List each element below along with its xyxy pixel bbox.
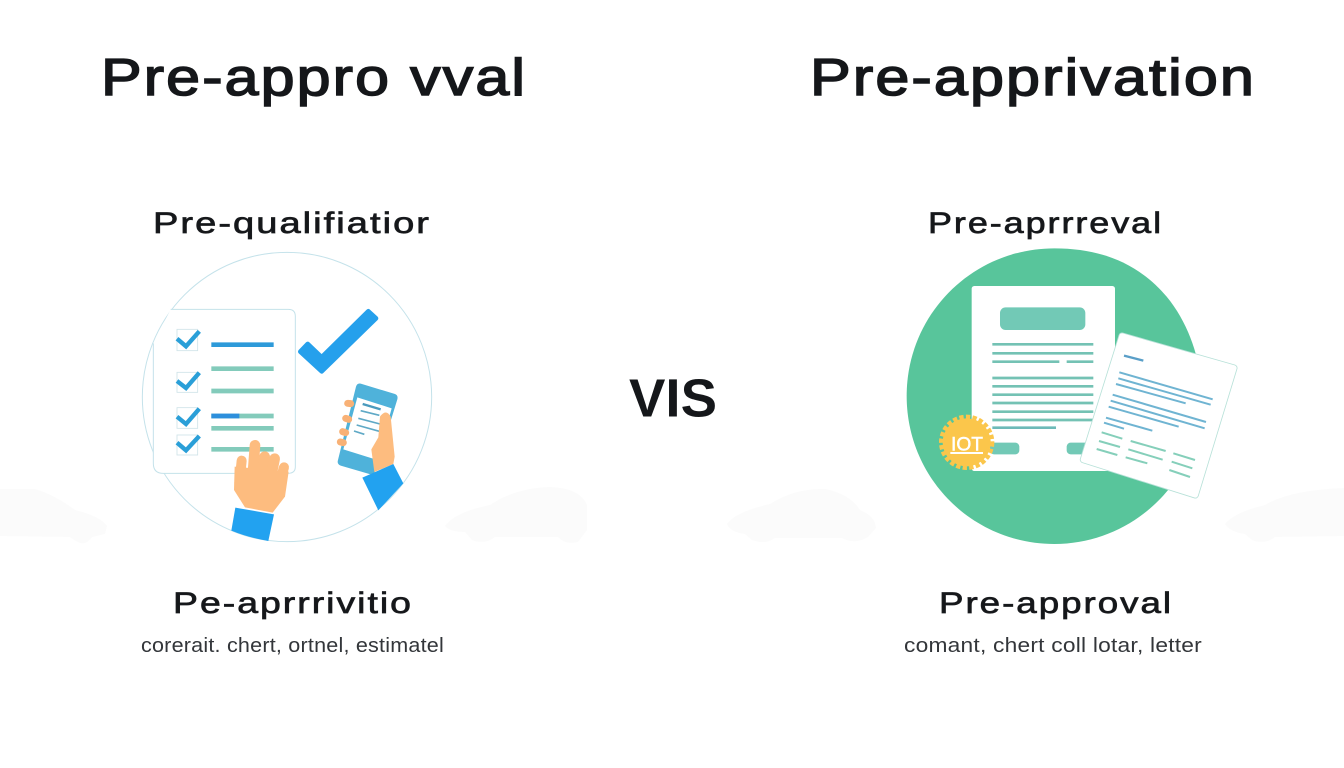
left option label: Pe-aprrrivitio (173, 587, 413, 620)
letter table lines (1097, 432, 1195, 477)
versus label: VIS (629, 368, 717, 428)
list lines (211, 345, 274, 449)
checklist paper (153, 309, 295, 473)
document lines (992, 344, 1093, 428)
letter body lines (1104, 356, 1213, 431)
check marks (177, 331, 199, 450)
document buttons (990, 443, 1019, 454)
header bar (1000, 307, 1085, 330)
left requirements text: corerait. chert, ortnel, estimatel (141, 635, 444, 657)
phone text lines (354, 404, 381, 434)
tilted letter (1083, 336, 1234, 495)
hand on checklist (231, 445, 289, 541)
left cuff (231, 508, 274, 541)
seal badge (941, 417, 992, 468)
right requirements text: comant, chert coll lotar, letter (904, 635, 1202, 657)
right subheading: Pre-aprrreval (928, 207, 1163, 240)
checkboxes (177, 329, 198, 455)
main document (972, 286, 1115, 471)
outline circle (142, 252, 432, 542)
thumb and palm (371, 412, 395, 472)
right cuff (362, 464, 403, 510)
left subheading: Pre-qualifiatior (153, 207, 431, 240)
seal badge: IOT (951, 435, 983, 456)
illustration: pre-approval documents (907, 248, 1234, 544)
fingers behind phone (340, 403, 351, 443)
left title: Pre-appro vval (101, 49, 527, 107)
illustration: pre-qualification checklist (142, 252, 432, 542)
green circle (907, 248, 1202, 544)
ghost car backgrounds (0, 487, 1344, 543)
large check mark (300, 311, 376, 371)
right option label: Pre-approval (939, 587, 1173, 620)
phone in hand (338, 383, 403, 510)
right title: Pre-apprivation (810, 49, 1256, 107)
